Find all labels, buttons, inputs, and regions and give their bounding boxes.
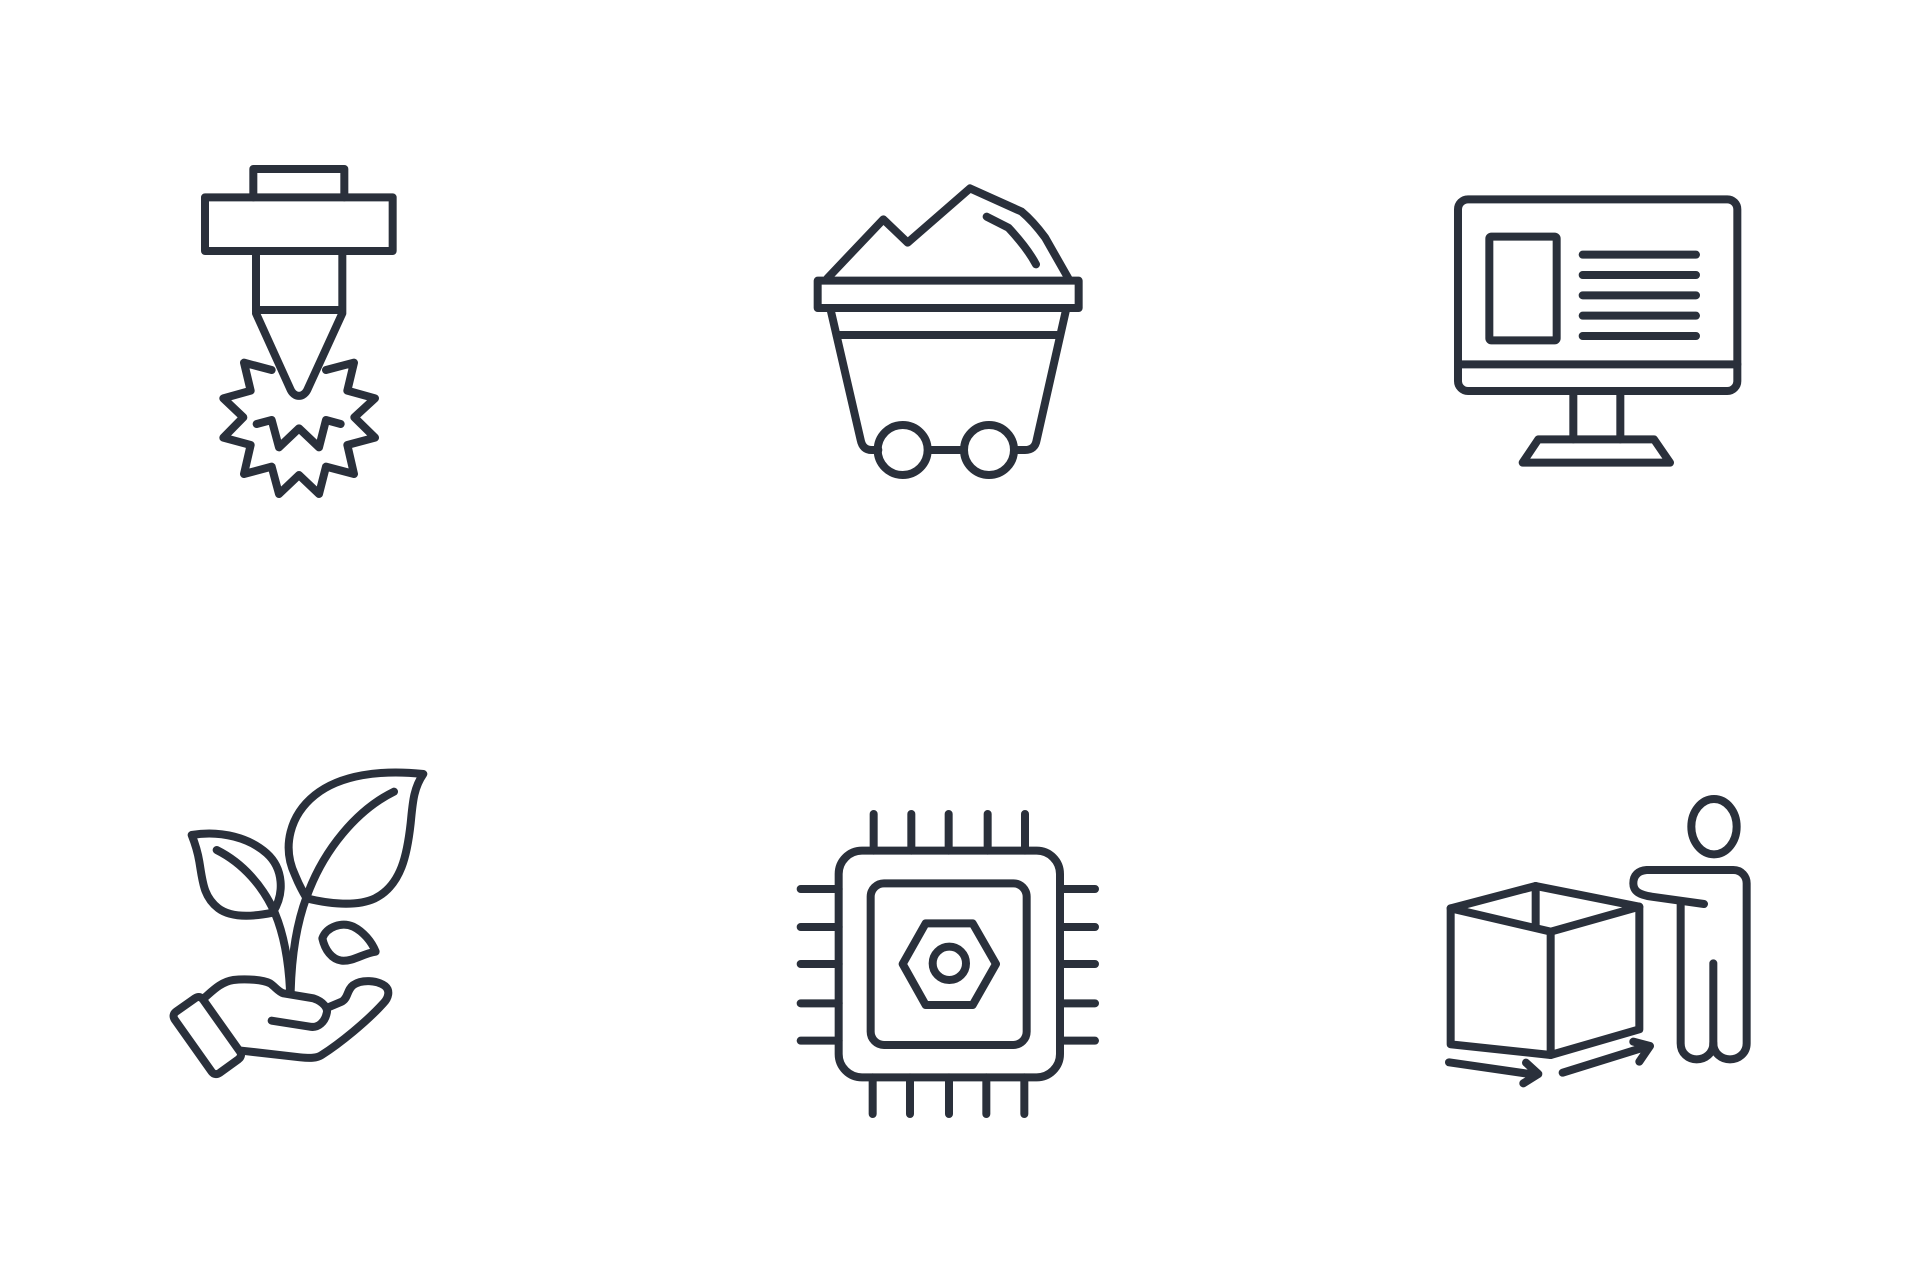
icon: laser cutter head with burst (205, 169, 393, 494)
icon: microchip with hex nut (801, 814, 1095, 1114)
icon: computer monitor with content layout (1458, 199, 1737, 463)
icon: hand holding a seedling (174, 772, 423, 1074)
icon: mine cart with ore (818, 188, 1079, 475)
icon: person beside a box with dimension arrows (1449, 799, 1747, 1083)
